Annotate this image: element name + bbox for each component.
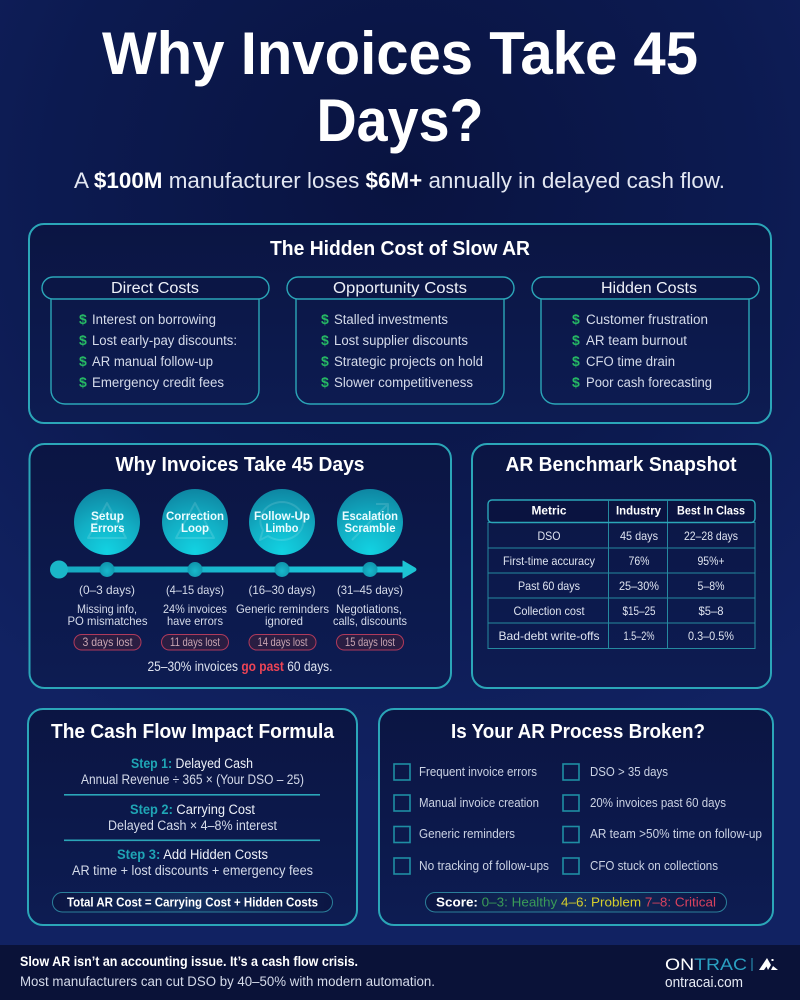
stage 4: escalation scramble: Negotiations, (336, 602, 402, 616)
stage 3: follow-up limbo: 14 days lost (258, 635, 308, 649)
stage 1: setup errors: PO mismatches (68, 614, 148, 628)
checklist left column (394, 764, 549, 874)
card: hidden costs: $ (572, 353, 580, 369)
panel: why invoices take 45 days (30, 444, 451, 688)
stage 1: setup errors: 3 days lost (82, 635, 133, 649)
card: direct costs: $ (79, 353, 87, 369)
checklist right column: CFO stuck on collections (590, 858, 718, 873)
card: opportunity costs: Stalled investments (334, 312, 448, 327)
card: opportunity costs: Strategic projects on hold (334, 354, 483, 369)
card: hidden costs: CFO time drain (586, 354, 675, 369)
stage 3: follow-up limbo: Limbo (266, 521, 298, 535)
checklist right column (563, 764, 762, 874)
card: direct costs: Lost early-pay discounts: (92, 333, 237, 348)
footer message: Most manufacturers can cut DSO by 40–50% with modern automation. (20, 974, 435, 989)
checklist left column: Frequent invoice errors (419, 764, 537, 779)
stage 1: setup errors: Missing info, (77, 602, 137, 616)
card: direct costs: Interest on borrowing (92, 312, 216, 327)
rows: DSO (538, 529, 560, 543)
rows: 45 days (620, 529, 658, 543)
rows: Collection cost (514, 604, 585, 618)
subtitle: A $100M manufacturer loses $6M+ annually in delayed cash flow. (74, 168, 725, 193)
card: direct costs: Direct Costs (111, 280, 199, 297)
checklist right column: AR team >50% time on follow-up (590, 826, 762, 841)
stage 4: escalation scramble: calls, discounts (333, 614, 407, 628)
rows: 76% (628, 554, 650, 568)
stage 2: correction loop: have errors (167, 614, 223, 628)
stage 1: setup errors (68, 489, 148, 650)
card: hidden costs: AR team burnout (586, 333, 687, 348)
rows (498, 529, 738, 643)
heading: formula: The Cash Flow Impact Formula (51, 721, 335, 743)
heading: timeline: Why Invoices Take 45 Days (116, 454, 364, 476)
stage 2: correction loop (162, 489, 228, 650)
title: Days? (316, 87, 484, 154)
card: opportunity costs: Slower competitiveness (334, 375, 473, 390)
card: direct costs: $ (79, 311, 87, 327)
stage 4: escalation scramble (333, 489, 407, 650)
logo: ontrac: ONTRAC (665, 955, 747, 974)
checklist left column: Manual invoice creation (419, 795, 539, 810)
heading: benchmark: AR Benchmark Snapshot (506, 454, 737, 476)
step 3 (72, 847, 313, 878)
card: opportunity costs: Lost supplier discounts (334, 333, 468, 348)
rows: 0.3–0.5% (688, 629, 734, 643)
rows: $5–8 (698, 604, 724, 618)
rows: 95%+ (698, 554, 724, 568)
stage 2: correction loop: (4–15 days) (166, 583, 224, 597)
title (102, 20, 698, 154)
score pill: Score: 0–3: Healthy 4–6: Problem 7–8: Critical (436, 894, 716, 910)
stage 2: correction loop: Correction (166, 509, 224, 523)
heading: checklist: Is Your AR Process Broken? (451, 721, 705, 743)
table header: Metric (532, 504, 567, 518)
logo: ontrac: ontracai.com (665, 975, 743, 991)
card: direct costs (42, 277, 269, 404)
stage 3: follow-up limbo: ignored (265, 614, 303, 628)
checklist right column: 20% invoices past 60 days (590, 795, 726, 810)
stage 3: follow-up limbo (236, 489, 329, 650)
stage 4: escalation scramble: (31–45 days) (337, 583, 403, 597)
total cost pill (52, 892, 332, 912)
step 1: Annual Revenue ÷ 365 × (Your DSO – 25) (81, 772, 304, 787)
stage 2: correction loop: Loop (181, 521, 209, 535)
total cost pill: Total AR Cost = Carrying Cost + Hidden Costs (67, 894, 318, 910)
rows: First-time accuracy (503, 554, 595, 568)
timeline note: 25–30% invoices go past 60 days. (148, 659, 332, 674)
panel: hidden cost of slow AR (29, 224, 771, 423)
rows: 22–28 days (684, 529, 738, 543)
logo: ontrac (665, 955, 778, 991)
checklist left column: No tracking of follow-ups (419, 858, 549, 873)
stage 1: setup errors: Errors (90, 521, 125, 535)
rows: 1.5–2% (624, 629, 655, 643)
rows: 25–30% (619, 579, 659, 593)
rows: Bad-debt write-offs (498, 629, 600, 643)
stage 2: correction loop: 24% invoices (163, 602, 227, 616)
card: opportunity costs (287, 277, 514, 404)
card: opportunity costs: $ (321, 353, 329, 369)
card: hidden costs: $ (572, 332, 580, 348)
table header: Best In Class (677, 504, 745, 518)
card: opportunity costs: $ (321, 374, 329, 390)
rows: 5–8% (698, 579, 725, 593)
rows: $15–25 (622, 604, 656, 618)
rows: Past 60 days (518, 579, 580, 593)
panel: cash flow impact formula (28, 709, 357, 925)
checklist right column: DSO > 35 days (590, 764, 668, 779)
stage 4: escalation scramble: 15 days lost (345, 635, 396, 649)
stage 2: correction loop: 11 days lost (170, 635, 221, 649)
card: hidden costs: Hidden Costs (601, 280, 697, 297)
card: hidden costs: Poor cash forecasting (586, 375, 712, 390)
step 1 (81, 756, 304, 787)
step 3: Step 3: Add Hidden Costs (117, 847, 268, 862)
panel: is your AR process broken (379, 709, 773, 925)
card: direct costs: $ (79, 374, 87, 390)
heading: hidden cost: The Hidden Cost of Slow AR (270, 238, 531, 260)
stage 3: follow-up limbo: Follow-Up (254, 509, 310, 523)
footer (0, 945, 800, 1000)
benchmark table (488, 500, 755, 648)
panel: AR benchmark snapshot (472, 444, 771, 688)
stage 4: escalation scramble: Scramble (344, 521, 396, 535)
card: hidden costs (532, 277, 759, 404)
footer message (20, 954, 435, 989)
step 2: Step 2: Carrying Cost (130, 802, 255, 817)
card: hidden costs: $ (572, 374, 580, 390)
card: direct costs: AR manual follow-up (92, 354, 213, 369)
timeline arrow (50, 560, 416, 578)
footer message: Slow AR isn’t an accounting issue. It’s a cash flow crisis. (20, 954, 358, 969)
checklist left column: Generic reminders (419, 826, 515, 841)
card: direct costs: Emergency credit fees (92, 375, 224, 390)
step 2: Delayed Cash × 4–8% interest (108, 818, 277, 833)
step 3: AR time + lost discounts + emergency fees (72, 863, 313, 878)
stage 1: setup errors: (0–3 days) (79, 583, 135, 597)
card: hidden costs: $ (572, 311, 580, 327)
step 2 (108, 802, 277, 833)
card: hidden costs: Customer frustration (586, 312, 708, 327)
card: opportunity costs: $ (321, 311, 329, 327)
card: opportunity costs: Opportunity Costs (333, 280, 467, 297)
card: opportunity costs: $ (321, 332, 329, 348)
card: direct costs: $ (79, 332, 87, 348)
stage 3: follow-up limbo: Generic reminders (236, 602, 329, 616)
title: Why Invoices Take 45 (102, 20, 698, 87)
stage 3: follow-up limbo: (16–30 days) (248, 583, 316, 597)
step 1: Step 1: Delayed Cash (131, 756, 253, 771)
table header: Industry (616, 504, 661, 518)
stage 1: setup errors: Setup (91, 509, 124, 523)
stage 4: escalation scramble: Escalation (342, 509, 398, 523)
table header (488, 500, 755, 522)
